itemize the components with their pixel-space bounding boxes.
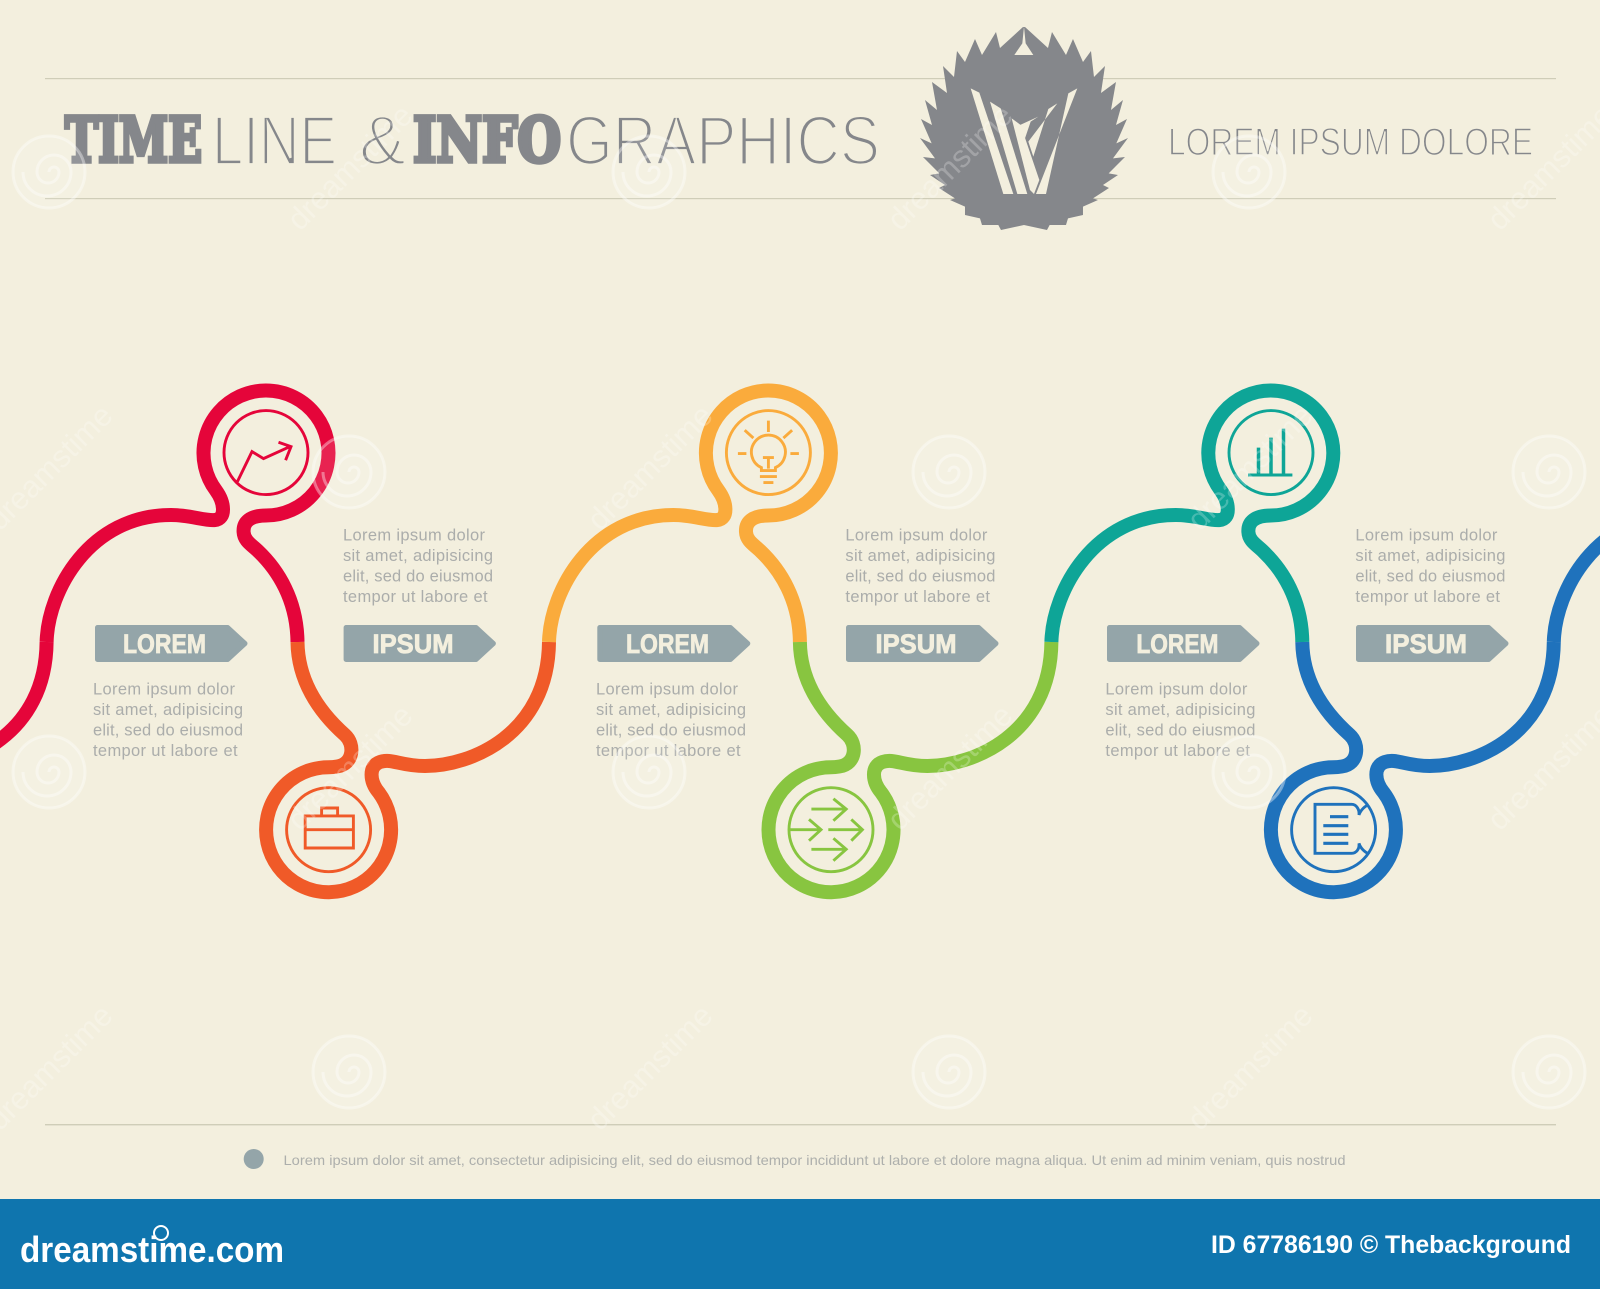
text block: upper 3: tempor ut labore et — [1355, 588, 1500, 606]
text block: upper 1: tempor ut labore et — [343, 588, 488, 606]
tag: ipsum 1 — [346, 628, 493, 660]
text block: upper 2: tempor ut labore et — [845, 588, 990, 606]
icon: light bulb — [726, 411, 810, 495]
tag: lorem 1: LOREM — [123, 629, 206, 659]
text block: upper 1: sit amet, adipisicing — [343, 547, 493, 565]
watermark layer: dreamstime — [580, 398, 719, 537]
text block: lower 1 — [93, 681, 243, 760]
title: TIME — [65, 104, 202, 177]
watermark layer: dreamstime — [880, 98, 1019, 237]
tag: lorem 3 — [1110, 628, 1257, 660]
text block: upper 1: elit, sed do eiusmod — [343, 568, 493, 586]
text block: upper 3 — [1355, 526, 1505, 606]
text block: lower 3: tempor ut labore et — [1105, 742, 1250, 760]
title: GRAPHICS — [566, 102, 880, 180]
text block: lower 3: Lorem ipsum dolor — [1105, 681, 1248, 699]
text block: lower 2: sit amet, adipisicing — [596, 701, 746, 719]
timeline: orange step — [266, 642, 549, 892]
watermark layer: dreamstime — [280, 698, 419, 837]
icon: document — [1292, 788, 1376, 872]
icon: briefcase — [287, 788, 371, 872]
icon: bar chart — [1229, 411, 1313, 495]
text block: upper 1 — [343, 526, 493, 606]
bottom credit band: ID 67786190 © Thebackground — [1211, 1231, 1571, 1259]
text block: lower 2: tempor ut labore et — [596, 742, 741, 760]
tag: ipsum 2 — [848, 628, 996, 660]
watermark layer: dreamstime — [880, 698, 1019, 837]
subtitle: LOREM IPSUM DOLORE — [1168, 121, 1533, 164]
text block: lower 3: elit, sed do eiusmod — [1105, 722, 1255, 740]
tag: ipsum 3 — [1358, 628, 1506, 660]
text block: lower 2 — [596, 681, 746, 760]
text block: upper 1: Lorem ipsum dolor — [343, 526, 486, 544]
icon: chart arrow — [224, 411, 308, 495]
title — [65, 102, 880, 180]
timeline: outgoing blue segment — [1554, 515, 1600, 642]
tag: lorem 3: LOREM — [1136, 629, 1218, 659]
title: LINE — [212, 102, 337, 180]
text block: lower 2: elit, sed do eiusmod — [596, 722, 746, 740]
tag: ipsum 3: IPSUM — [1385, 629, 1467, 659]
watermark layer: dreamstime — [1180, 998, 1319, 1137]
text block: lower 3: sit amet, adipisicing — [1105, 701, 1255, 719]
tag: lorem 1 — [98, 628, 245, 660]
timeline: incoming red segment — [0, 642, 47, 892]
text block: lower 3 — [1105, 681, 1255, 760]
timeline: red step — [47, 391, 328, 642]
text block: upper 2 — [845, 526, 995, 606]
text block: upper 3: elit, sed do eiusmod — [1355, 568, 1505, 586]
title: & — [359, 102, 406, 180]
text block: upper 2: sit amet, adipisicing — [845, 547, 995, 565]
bottom credit band — [0, 1199, 1600, 1289]
text block: upper 2: Lorem ipsum dolor — [845, 526, 988, 544]
bottom credit band: dreamstime.com — [20, 1229, 284, 1270]
timeline: yellow step — [549, 391, 831, 642]
text block: upper 3: sit amet, adipisicing — [1355, 547, 1505, 565]
text block: upper 3: Lorem ipsum dolor — [1355, 526, 1498, 544]
logo badge — [920, 27, 1128, 230]
tag: ipsum 2: IPSUM — [876, 629, 956, 659]
timeline: green step — [769, 642, 1051, 892]
watermark layer: dreamstime — [1180, 398, 1319, 537]
timeline: teal step — [1051, 391, 1333, 642]
text block: lower 1: Lorem ipsum dolor — [93, 681, 236, 699]
footnote bullet — [244, 1149, 264, 1169]
text block: lower 1: sit amet, adipisicing — [93, 701, 243, 719]
text block: upper 2: elit, sed do eiusmod — [845, 568, 995, 586]
tag: ipsum 1: IPSUM — [372, 629, 454, 659]
text block: lower 1: elit, sed do eiusmod — [93, 722, 243, 740]
text block: lower 1: tempor ut labore et — [93, 742, 238, 760]
text block: lower 2: Lorem ipsum dolor — [596, 681, 738, 699]
icon: arrows — [789, 788, 873, 872]
tag: lorem 2 — [600, 628, 748, 660]
watermark layer: dreamstime — [280, 98, 419, 237]
footnote text: Lorem ipsum dolor sit amet, consectetur adipisicing elit, sed do eiusmod tempor incididunt ut labore et dolore magna aliqua. Ut enim ad minim veniam, quis nostrud — [284, 1152, 1346, 1168]
tag: lorem 2: LOREM — [626, 629, 709, 659]
title: INFO — [413, 104, 561, 177]
watermark layer: dreamstime — [580, 998, 719, 1137]
timeline: blue step — [1271, 642, 1554, 892]
